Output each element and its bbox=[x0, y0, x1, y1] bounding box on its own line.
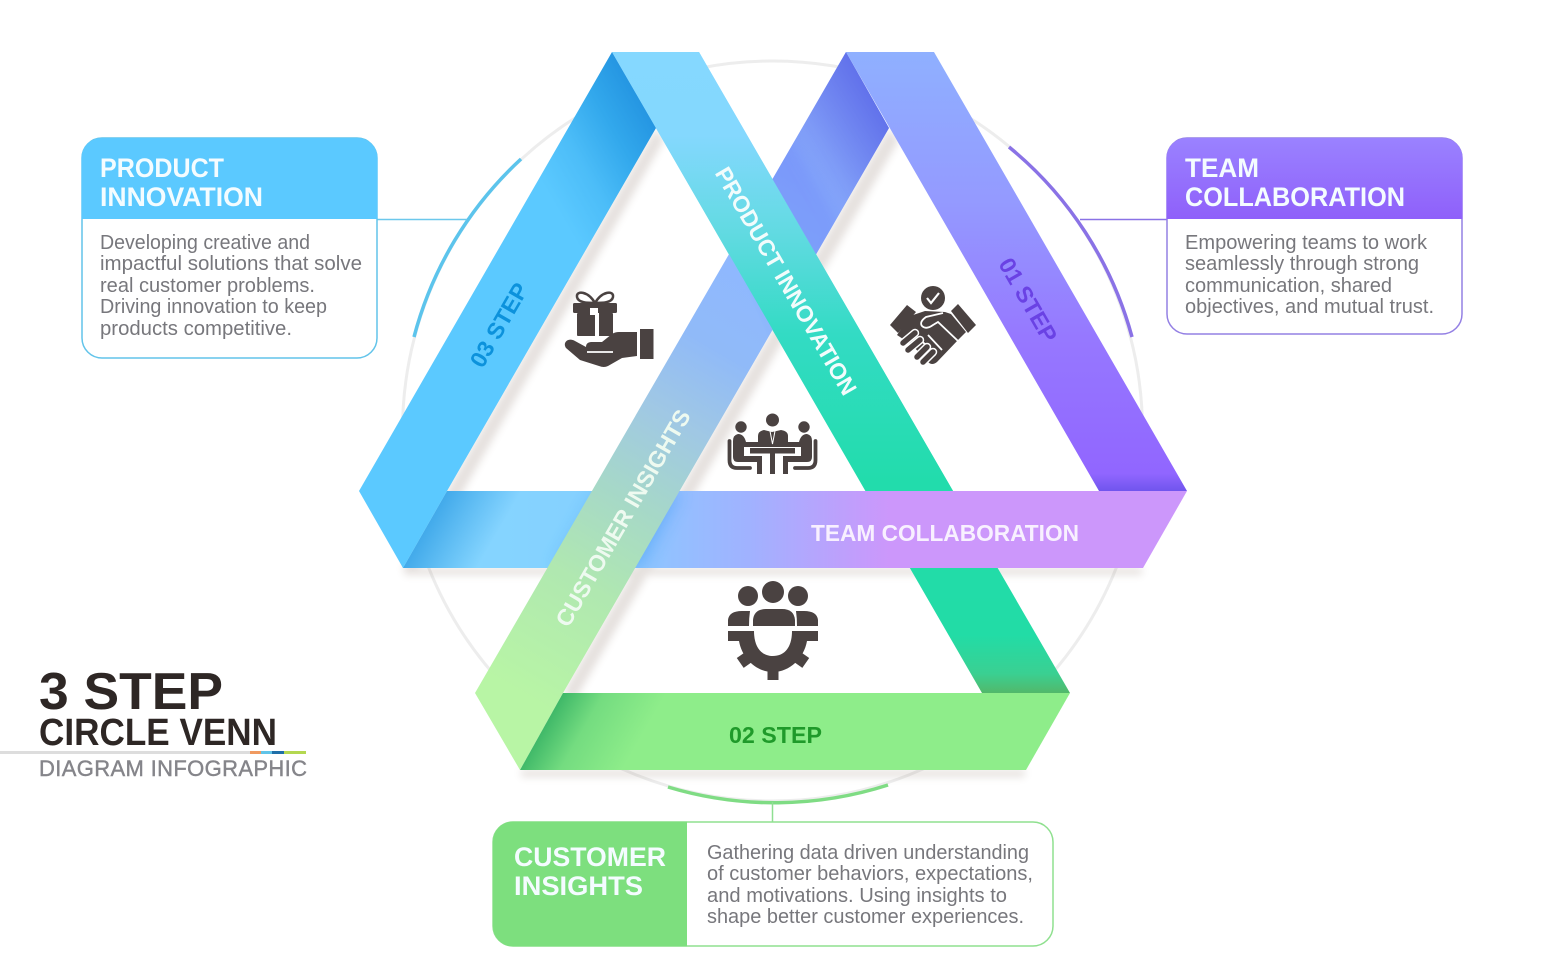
band drop shadows bbox=[403, 128, 1143, 777]
band: customer fold shading bbox=[802, 52, 889, 203]
icon: gift in hand bbox=[565, 293, 654, 367]
panel: team collaboration bbox=[1166, 138, 1462, 334]
band: product innovation upper part bbox=[612, 52, 953, 491]
band label: 02 step: 02 STEP bbox=[729, 722, 822, 748]
panel header: customer insights bbox=[493, 822, 687, 946]
title rule bbox=[0, 751, 306, 754]
band label: product innovation: PRODUCT INNOVATION bbox=[710, 162, 862, 400]
heading: customer insights: INSIGHTS bbox=[514, 871, 643, 901]
panel: product innovation bbox=[82, 138, 378, 358]
panel: customer insights bbox=[493, 822, 1053, 946]
panel header: product innovation bbox=[82, 138, 378, 219]
band label: 03 step: 03 STEP bbox=[464, 278, 534, 372]
body text: customer insights bbox=[707, 842, 1033, 928]
body text: product innovation: products competitive. bbox=[100, 318, 292, 340]
body text: product innovation: Driving innovation to keep bbox=[100, 296, 327, 318]
title: circle venn: CIRCLE VENN bbox=[39, 712, 277, 754]
body text: customer insights: Gathering data driven understanding bbox=[707, 842, 1029, 864]
band: product innovation lower part bbox=[612, 52, 1070, 693]
band: customer shadow on team band bbox=[555, 491, 680, 568]
triangular ribbon bbox=[359, 52, 1187, 770]
heading: customer insights: CUSTOMER bbox=[514, 842, 666, 872]
body text: customer insights: shape better customer experiences. bbox=[707, 906, 1024, 928]
heading: team collaboration: TEAM bbox=[1185, 153, 1259, 183]
band label: 01 step: 01 STEP bbox=[993, 253, 1063, 347]
heading: team collaboration: COLLABORATION bbox=[1185, 182, 1405, 212]
body text: product innovation bbox=[100, 232, 362, 340]
body text: product innovation: real customer problems. bbox=[100, 275, 315, 297]
body text: team collaboration: seamlessly through strong bbox=[1185, 253, 1419, 275]
arc: customer insights bbox=[668, 785, 888, 803]
subtitle: DIAGRAM INFOGRAPHIC bbox=[39, 756, 307, 781]
heading: team collaboration bbox=[1185, 153, 1405, 212]
band: step 02 green bbox=[520, 693, 1070, 770]
band label: team collaboration: TEAM COLLABORATION bbox=[811, 520, 1079, 546]
band label: customer insights: CUSTOMER INSIGHTS bbox=[550, 405, 696, 631]
body text: product innovation: impactful solutions that solve bbox=[100, 253, 362, 275]
band: team fold shading bbox=[403, 491, 523, 568]
title block bbox=[0, 663, 307, 781]
body text: team collaboration: Empowering teams to work bbox=[1185, 232, 1428, 254]
heading: customer insights bbox=[514, 842, 666, 901]
connector: team collaboration bbox=[1080, 218, 1167, 220]
band: customer insights bbox=[475, 52, 889, 770]
icon: team and gear bbox=[728, 581, 818, 680]
body text: product innovation: Developing creative and bbox=[100, 232, 310, 254]
icon: meeting at table bbox=[730, 414, 816, 474]
band: team collaboration bbox=[403, 491, 1187, 568]
heading: product innovation: INNOVATION bbox=[100, 182, 263, 212]
background circle ring bbox=[402, 61, 1142, 801]
body text: team collaboration bbox=[1185, 232, 1434, 318]
body text: customer insights: of customer behaviors, expectations, bbox=[707, 863, 1033, 885]
body text: team collaboration: objectives, and mutual trust. bbox=[1185, 296, 1434, 318]
body text: team collaboration: communication, shared bbox=[1185, 275, 1392, 297]
title: 3 step: 3 STEP bbox=[39, 663, 223, 721]
band: product shadow on customer band bbox=[772, 138, 840, 254]
heading: product innovation bbox=[100, 153, 263, 212]
arc: team collaboration bbox=[1009, 147, 1132, 337]
panel header: team collaboration bbox=[1166, 138, 1462, 219]
band: step 03 blue bbox=[359, 52, 656, 568]
icon: handshake with check bbox=[890, 286, 976, 364]
connector: product innovation bbox=[377, 218, 467, 220]
band: step 01 purple bbox=[846, 52, 1187, 491]
connector: customer insights bbox=[772, 802, 774, 822]
body text: customer insights: and motivations. Using insights to bbox=[707, 885, 1007, 907]
arc: product innovation bbox=[414, 159, 521, 337]
heading: product innovation: PRODUCT bbox=[100, 153, 224, 183]
